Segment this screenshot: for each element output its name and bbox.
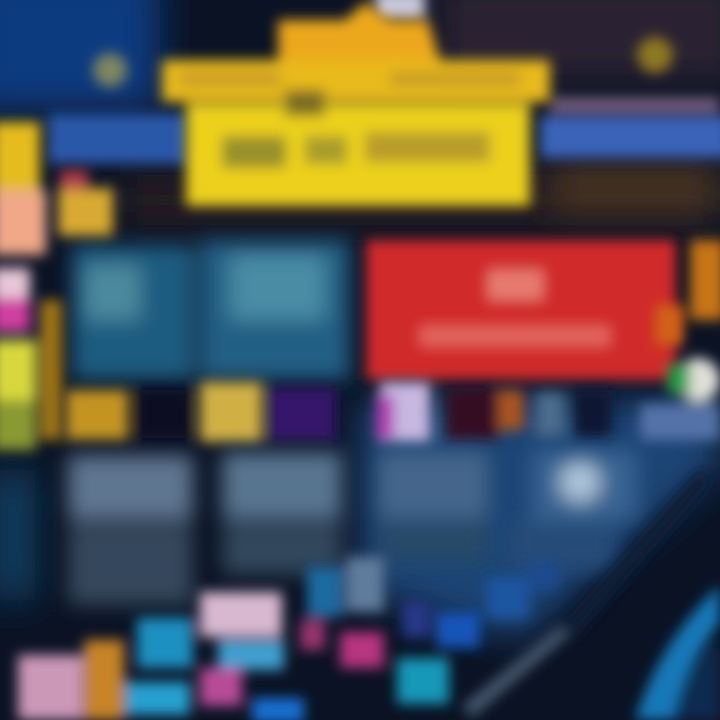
panel: teal left bbox=[72, 240, 350, 380]
top decorations bbox=[93, 0, 673, 87]
row of small tiles bbox=[66, 382, 612, 442]
bottom colourful tiles bbox=[18, 557, 558, 720]
red panel text smudge bbox=[420, 270, 610, 346]
row of grey-blue cards bbox=[68, 450, 637, 605]
title text smudges bbox=[180, 72, 520, 168]
panel: red right bbox=[366, 240, 676, 380]
right side stickers bbox=[640, 240, 720, 440]
title sign bbox=[162, 2, 550, 206]
bottom right blue curve bbox=[635, 585, 720, 720]
left column stickers bbox=[0, 122, 113, 450]
diagonal grey rail bbox=[462, 470, 712, 718]
blue banner bands bbox=[48, 98, 720, 164]
